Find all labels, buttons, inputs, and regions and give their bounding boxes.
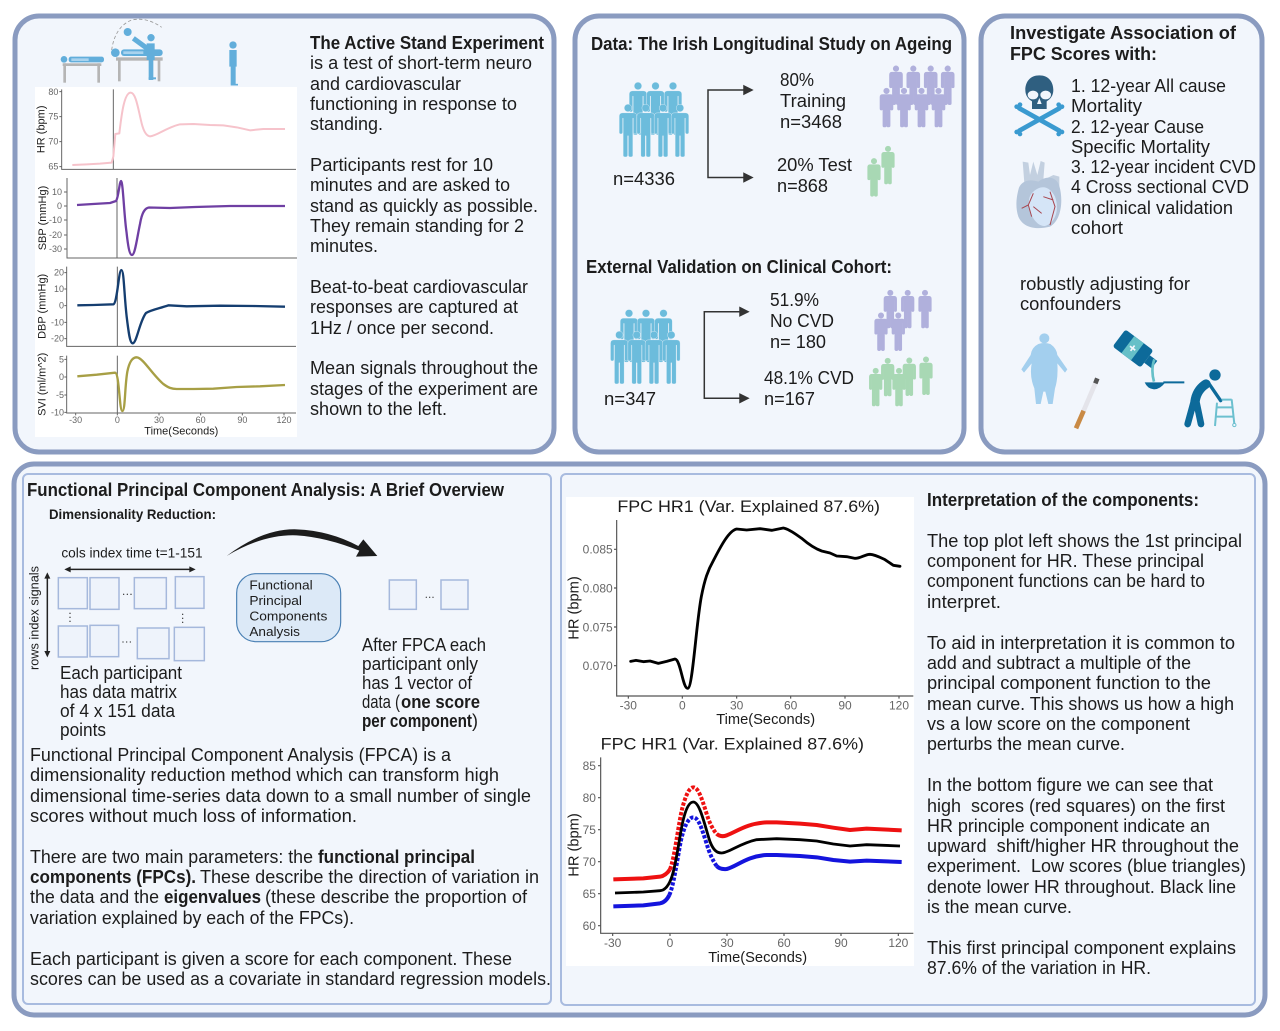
chart: mean curve with high and low scores: 70	[583, 855, 596, 869]
heading: interpretation: Interpretation of the components:	[927, 490, 1199, 510]
chart: SBP: -20	[49, 230, 62, 240]
panel: component interpretation	[561, 474, 1255, 1005]
chart: mean curve with high and low scores	[567, 735, 913, 966]
text: no CVD group: No CVD	[770, 311, 834, 331]
text: bottom figure explanation: In the bottom figure we can see that	[927, 775, 1213, 795]
text: confounders: robustly adjusting for	[1020, 274, 1190, 294]
text: interpretation aid: perturbs the mean curve.	[927, 734, 1125, 754]
chart: SBP: SBP (mmHg)	[37, 186, 49, 250]
text: CVD group: n=167	[764, 389, 815, 409]
icon: obesity figure	[1021, 333, 1067, 404]
text: test split	[777, 155, 852, 196]
diagram: data matrix: cols index time t=1-151	[61, 545, 203, 560]
panel: data	[575, 16, 964, 452]
text: active stand description: functioning in response to	[310, 94, 517, 114]
chart: SBP: 10	[52, 187, 62, 197]
chart: first principal component: 0.080	[583, 581, 613, 595]
text: active stand description: 1Hz / once per second.	[310, 318, 494, 338]
icon: TILDA participants	[619, 82, 689, 157]
icon: training participants	[880, 66, 954, 127]
text: bottom figure explanation: HR principle component indicate an	[927, 816, 1210, 836]
text: FPCA parameters: eigenvalues	[164, 887, 261, 907]
text: active stand description: and cardiovascular	[310, 74, 461, 94]
text: outcomes list: Mortality	[1071, 96, 1142, 116]
text: active stand description: The Active Stand Experiment	[310, 33, 544, 53]
chart: SVI: 120	[276, 415, 291, 425]
text: FPCA parameters: These describe the direction of variation in	[200, 867, 539, 887]
text: FPCA parameters: the data and the	[30, 887, 159, 907]
chart: SBP: -30	[49, 244, 62, 254]
chart: first principal component: -30	[620, 698, 637, 712]
chart: first principal component: 0.085	[583, 543, 613, 557]
text: outcomes list	[1071, 76, 1256, 238]
heading: investigate association	[1010, 23, 1237, 64]
text: active stand description: Participants rest for 10	[310, 155, 493, 175]
icon: active stand procedure	[61, 19, 238, 85]
text: after FPCA: After FPCA each	[362, 635, 486, 655]
text: outcomes list: on clinical validation	[1071, 198, 1233, 218]
chart: first principal component	[567, 498, 913, 728]
chart: mean curve with high and low scores: 30	[720, 936, 734, 950]
diagram: data matrix	[26, 545, 204, 670]
chart: first principal component: 60	[784, 698, 798, 712]
chart: DBP	[36, 267, 296, 346]
chart: SVI: -10	[51, 407, 64, 417]
label: n=347: n=347	[604, 389, 656, 409]
chart: SVI: -30	[69, 415, 82, 425]
text: FPCA description: scores without much loss of information.	[30, 806, 357, 826]
curve: mean in black	[615, 802, 900, 893]
text: CVD group: 48.1% CVD	[764, 368, 854, 388]
chart: DBP: 20	[54, 268, 64, 278]
text: outcomes list: 4 Cross sectional CVD	[1071, 177, 1249, 197]
text: interpretation aid: mean curve. This shows us how a high	[927, 694, 1234, 714]
icon: skull and crossbones	[1014, 75, 1064, 136]
chart: SVI: 60	[196, 415, 206, 425]
chart: HR: 80	[48, 87, 58, 97]
text: bottom figure explanation: is the mean curve.	[927, 897, 1072, 917]
callout: FPCA pill: Components	[249, 608, 328, 623]
chart: SVI: -5	[56, 390, 64, 400]
chart: SVI: SVI (ml/m^2)	[36, 353, 48, 416]
text: active stand description: minutes.	[310, 236, 378, 256]
text: top plot explanation	[927, 531, 1242, 612]
heading: dimensionality reduction: Dimensionality Reduction:	[49, 506, 216, 522]
chart: HR: 75	[48, 112, 58, 122]
text: FPCA parameters	[30, 847, 539, 928]
chart: HR: 70	[48, 137, 58, 147]
panel: active stand experiment	[15, 16, 554, 452]
text: variance explained: This first principal component explains	[927, 938, 1236, 958]
text: interpretation aid: add and subtract a multiple of the	[927, 653, 1191, 673]
text: active stand description: stages of the experiment are	[310, 379, 538, 399]
chart: SVI	[36, 353, 296, 437]
text: outcomes list: cohort	[1071, 218, 1123, 238]
chart: mean curve with high and low scores: 0	[667, 936, 674, 950]
arrow: curved FPCA arrow	[227, 529, 377, 557]
icon: no CVD participants	[875, 290, 931, 351]
text: after FPCA: )	[472, 711, 478, 731]
chart: first principal component: 0	[679, 698, 686, 712]
icon: CVD participants	[869, 357, 932, 406]
chart: first principal component: FPC HR1 (Var. Explained 87.6%)	[617, 498, 880, 516]
text: FPCA description	[30, 745, 531, 826]
icon: frail person with walker	[1188, 369, 1236, 427]
chart: first principal component: Time(Seconds)	[716, 712, 815, 728]
text: active stand description: shown to the left.	[310, 399, 447, 419]
text: top plot explanation: The top plot left shows the 1st principal	[927, 531, 1242, 551]
chart: mean curve with high and low scores: -30	[604, 936, 622, 950]
chart: DBP: DBP (mmHg)	[36, 274, 48, 339]
chart: mean curve with high and low scores: HR (bpm)	[567, 813, 583, 877]
text: interpretation aid: To aid in interpretation it is common to	[927, 633, 1235, 653]
chart: HR	[36, 87, 296, 172]
icon: clinical cohort participants	[610, 309, 680, 384]
chart area: FPC plots	[566, 497, 914, 966]
text: FPCA parameters: There are two main parameters: the	[30, 847, 313, 867]
text: each participant: points	[60, 720, 106, 740]
chart: mean curve with high and low scores: 60	[583, 919, 596, 933]
text: active stand description: is a test of short-term neuro	[310, 53, 532, 73]
callout: FPCA pill: Analysis	[249, 624, 300, 639]
heading: investigate association: Investigate Association of	[1010, 23, 1237, 43]
text: CVD group	[764, 368, 854, 409]
text: FPCA parameters: (these describe the proportion of	[265, 887, 528, 907]
text: active stand description: standing.	[310, 114, 383, 134]
panel: FPCA overview	[23, 474, 551, 1004]
chart: mean curve with high and low scores: FPC HR1 (Var. Explained 87.6%)	[601, 735, 864, 753]
chart: mean curve with high and low scores: 60	[777, 936, 791, 950]
text: FPCA parameters: functional principal	[318, 847, 475, 867]
text: FPCA description: dimensionality reduction method which can transform high	[30, 765, 499, 785]
chart: mean curve with high and low scores: 90	[834, 936, 848, 950]
text: active stand description: Mean signals throughout the	[310, 358, 538, 378]
heading: data: Data: The Irish Longitudinal Study on Ageing	[591, 34, 952, 54]
text: top plot explanation: interpret.	[927, 592, 1001, 612]
arrow: clinical split	[704, 308, 748, 402]
text: variance explained	[927, 938, 1236, 978]
text: training split: Training	[780, 91, 846, 111]
text: training split	[780, 70, 846, 132]
text: active stand description: responses are captured at	[310, 297, 518, 317]
text: each participant: has data matrix	[60, 682, 177, 702]
chart: first principal component: 0.075	[583, 620, 613, 634]
callout: FPCA pill: Functional	[249, 578, 313, 593]
text: bottom figure explanation: upward shift/higher HR throughout the	[927, 836, 1239, 856]
text: participant scores	[30, 949, 551, 989]
text: confounders: confounders	[1020, 294, 1121, 314]
label: n=4336: n=4336	[613, 169, 675, 189]
chart: SVI: 0	[59, 372, 64, 382]
text: no CVD group: n= 180	[770, 332, 826, 352]
chart: DBP: 0	[59, 301, 64, 311]
heading: external validation: External Validation on Clinical Cohort:	[586, 257, 892, 277]
chart: first principal component: 30	[730, 698, 744, 712]
text: after FPCA: data (	[362, 692, 400, 712]
text: bottom figure explanation: denote lower HR throughout. Black line	[927, 877, 1236, 897]
text: top plot explanation: component functions can be hard to	[927, 571, 1205, 591]
text: participant scores: scores can be used as a covariate in standard regression models.	[30, 969, 551, 989]
icon: cigarette	[1076, 378, 1097, 428]
chart: SVI: 0	[115, 415, 120, 425]
text: each participant: of 4 x 151 data	[60, 701, 176, 721]
icon: test participants	[868, 146, 894, 196]
text: after FPCA: participant only	[362, 654, 478, 674]
heading: investigate association: FPC Scores with:	[1010, 44, 1157, 64]
chart: first principal component: 120	[889, 698, 909, 712]
text: after FPCA: per component	[362, 711, 472, 731]
diagram: score vector	[389, 580, 468, 609]
text: bottom figure explanation: experiment. Low scores (blue triangles)	[927, 856, 1246, 876]
chart: HR: HR (bpm)	[36, 106, 48, 153]
chart: HR: 65	[48, 162, 58, 172]
text: FPCA description: Functional Principal Component Analysis (FPCA) is a	[30, 745, 452, 765]
text: active stand description: minutes and are asked to	[310, 175, 510, 195]
text: outcomes list: 2. 12-year Cause	[1071, 117, 1204, 137]
text: training split: n=3468	[780, 112, 842, 132]
text: interpretation aid: vs a low score on the component	[927, 714, 1190, 734]
chart: first principal component: 0.070	[583, 659, 613, 673]
curve: high scores in red	[613, 787, 902, 879]
text: interpretation aid: principal component function to the	[927, 673, 1211, 693]
chart: SVI: 30	[154, 415, 164, 425]
chart: mean curve with high and low scores: Time(Seconds)	[708, 950, 807, 966]
text: FPCA parameters: variation explained by each of the FPCs).	[30, 908, 354, 928]
chart: SBP: -10	[49, 215, 62, 225]
text: bottom figure explanation: high scores (red squares) on the first	[927, 796, 1225, 816]
text: outcomes list: Specific Mortality	[1071, 137, 1210, 157]
chart: first principal component: HR (bpm)	[567, 576, 583, 640]
text: after FPCA: has 1 vector of	[362, 673, 473, 693]
curve: low scores in blue	[613, 817, 902, 906]
panel: FPCA outer container	[14, 464, 1265, 1015]
text: bottom figure explanation	[927, 775, 1246, 917]
icon: heart	[1016, 161, 1061, 228]
text: test split: n=868	[777, 176, 828, 196]
text: active stand description: stand as quickly as possible.	[310, 196, 538, 216]
chart: SBP	[37, 178, 297, 258]
text: FPCA description: dimensional time-series data down to a small number of single	[30, 786, 531, 806]
text: FPCA parameters: components (FPCs).	[30, 867, 196, 887]
heading: FPCA overview: Functional Principal Component Analysis: A Brief Overview	[27, 480, 505, 500]
text: each participant	[60, 663, 182, 740]
callout: FPCA pill: Principal	[249, 593, 302, 608]
text: outcomes list: 1. 12-year All cause	[1071, 76, 1226, 96]
chart: mean curve with high and low scores: 120	[888, 936, 909, 950]
text: no CVD group: 51.9%	[770, 290, 819, 310]
chart: DBP: -20	[51, 334, 64, 344]
chart: mean curve with high and low scores: 75	[583, 823, 596, 837]
chart: SVI: 90	[237, 415, 247, 425]
chart: first principal component: 90	[838, 698, 852, 712]
text: after FPCA: one score	[401, 692, 480, 712]
arrow: data split	[708, 86, 752, 182]
chart: mean curve with high and low scores: 65	[583, 887, 596, 901]
chart: SBP: 0	[57, 201, 62, 211]
chart: mean curve with high and low scores: 80	[583, 791, 596, 805]
text: active stand description: Beat-to-beat cardiovascular	[310, 277, 528, 297]
callout: FPCA pill	[237, 574, 341, 642]
chart: DBP: -10	[51, 317, 64, 327]
text: confounders	[1020, 274, 1190, 314]
panel: investigate association	[981, 16, 1262, 452]
text: training split: 80%	[780, 70, 814, 90]
text: after FPCA	[362, 635, 486, 731]
text: variance explained: 87.6% of the variation in HR.	[927, 958, 1151, 978]
text: test split: 20% Test	[777, 155, 852, 175]
chart: SVI: 5	[59, 354, 64, 364]
text: no CVD group	[770, 290, 834, 352]
text: each participant: Each participant	[60, 663, 182, 683]
text: outcomes list: 3. 12-year incident CVD	[1071, 157, 1256, 177]
text: active stand description: They remain standing for 2	[310, 216, 524, 236]
chart: SVI: Time(Seconds)	[144, 425, 218, 437]
text: interpretation aid	[927, 633, 1235, 754]
chart: mean signals	[35, 87, 297, 437]
diagram: data matrix: rows index signals	[26, 566, 41, 670]
chart: mean curve with high and low scores: 85	[583, 759, 596, 773]
icon: medicine bottle and spoon	[1113, 329, 1184, 389]
text: active stand description	[310, 33, 544, 419]
chart: DBP: 10	[54, 284, 64, 294]
text: top plot explanation: component for HR. These principal	[927, 551, 1204, 571]
text: participant scores: Each participant is given a score for each component. These	[30, 949, 512, 969]
